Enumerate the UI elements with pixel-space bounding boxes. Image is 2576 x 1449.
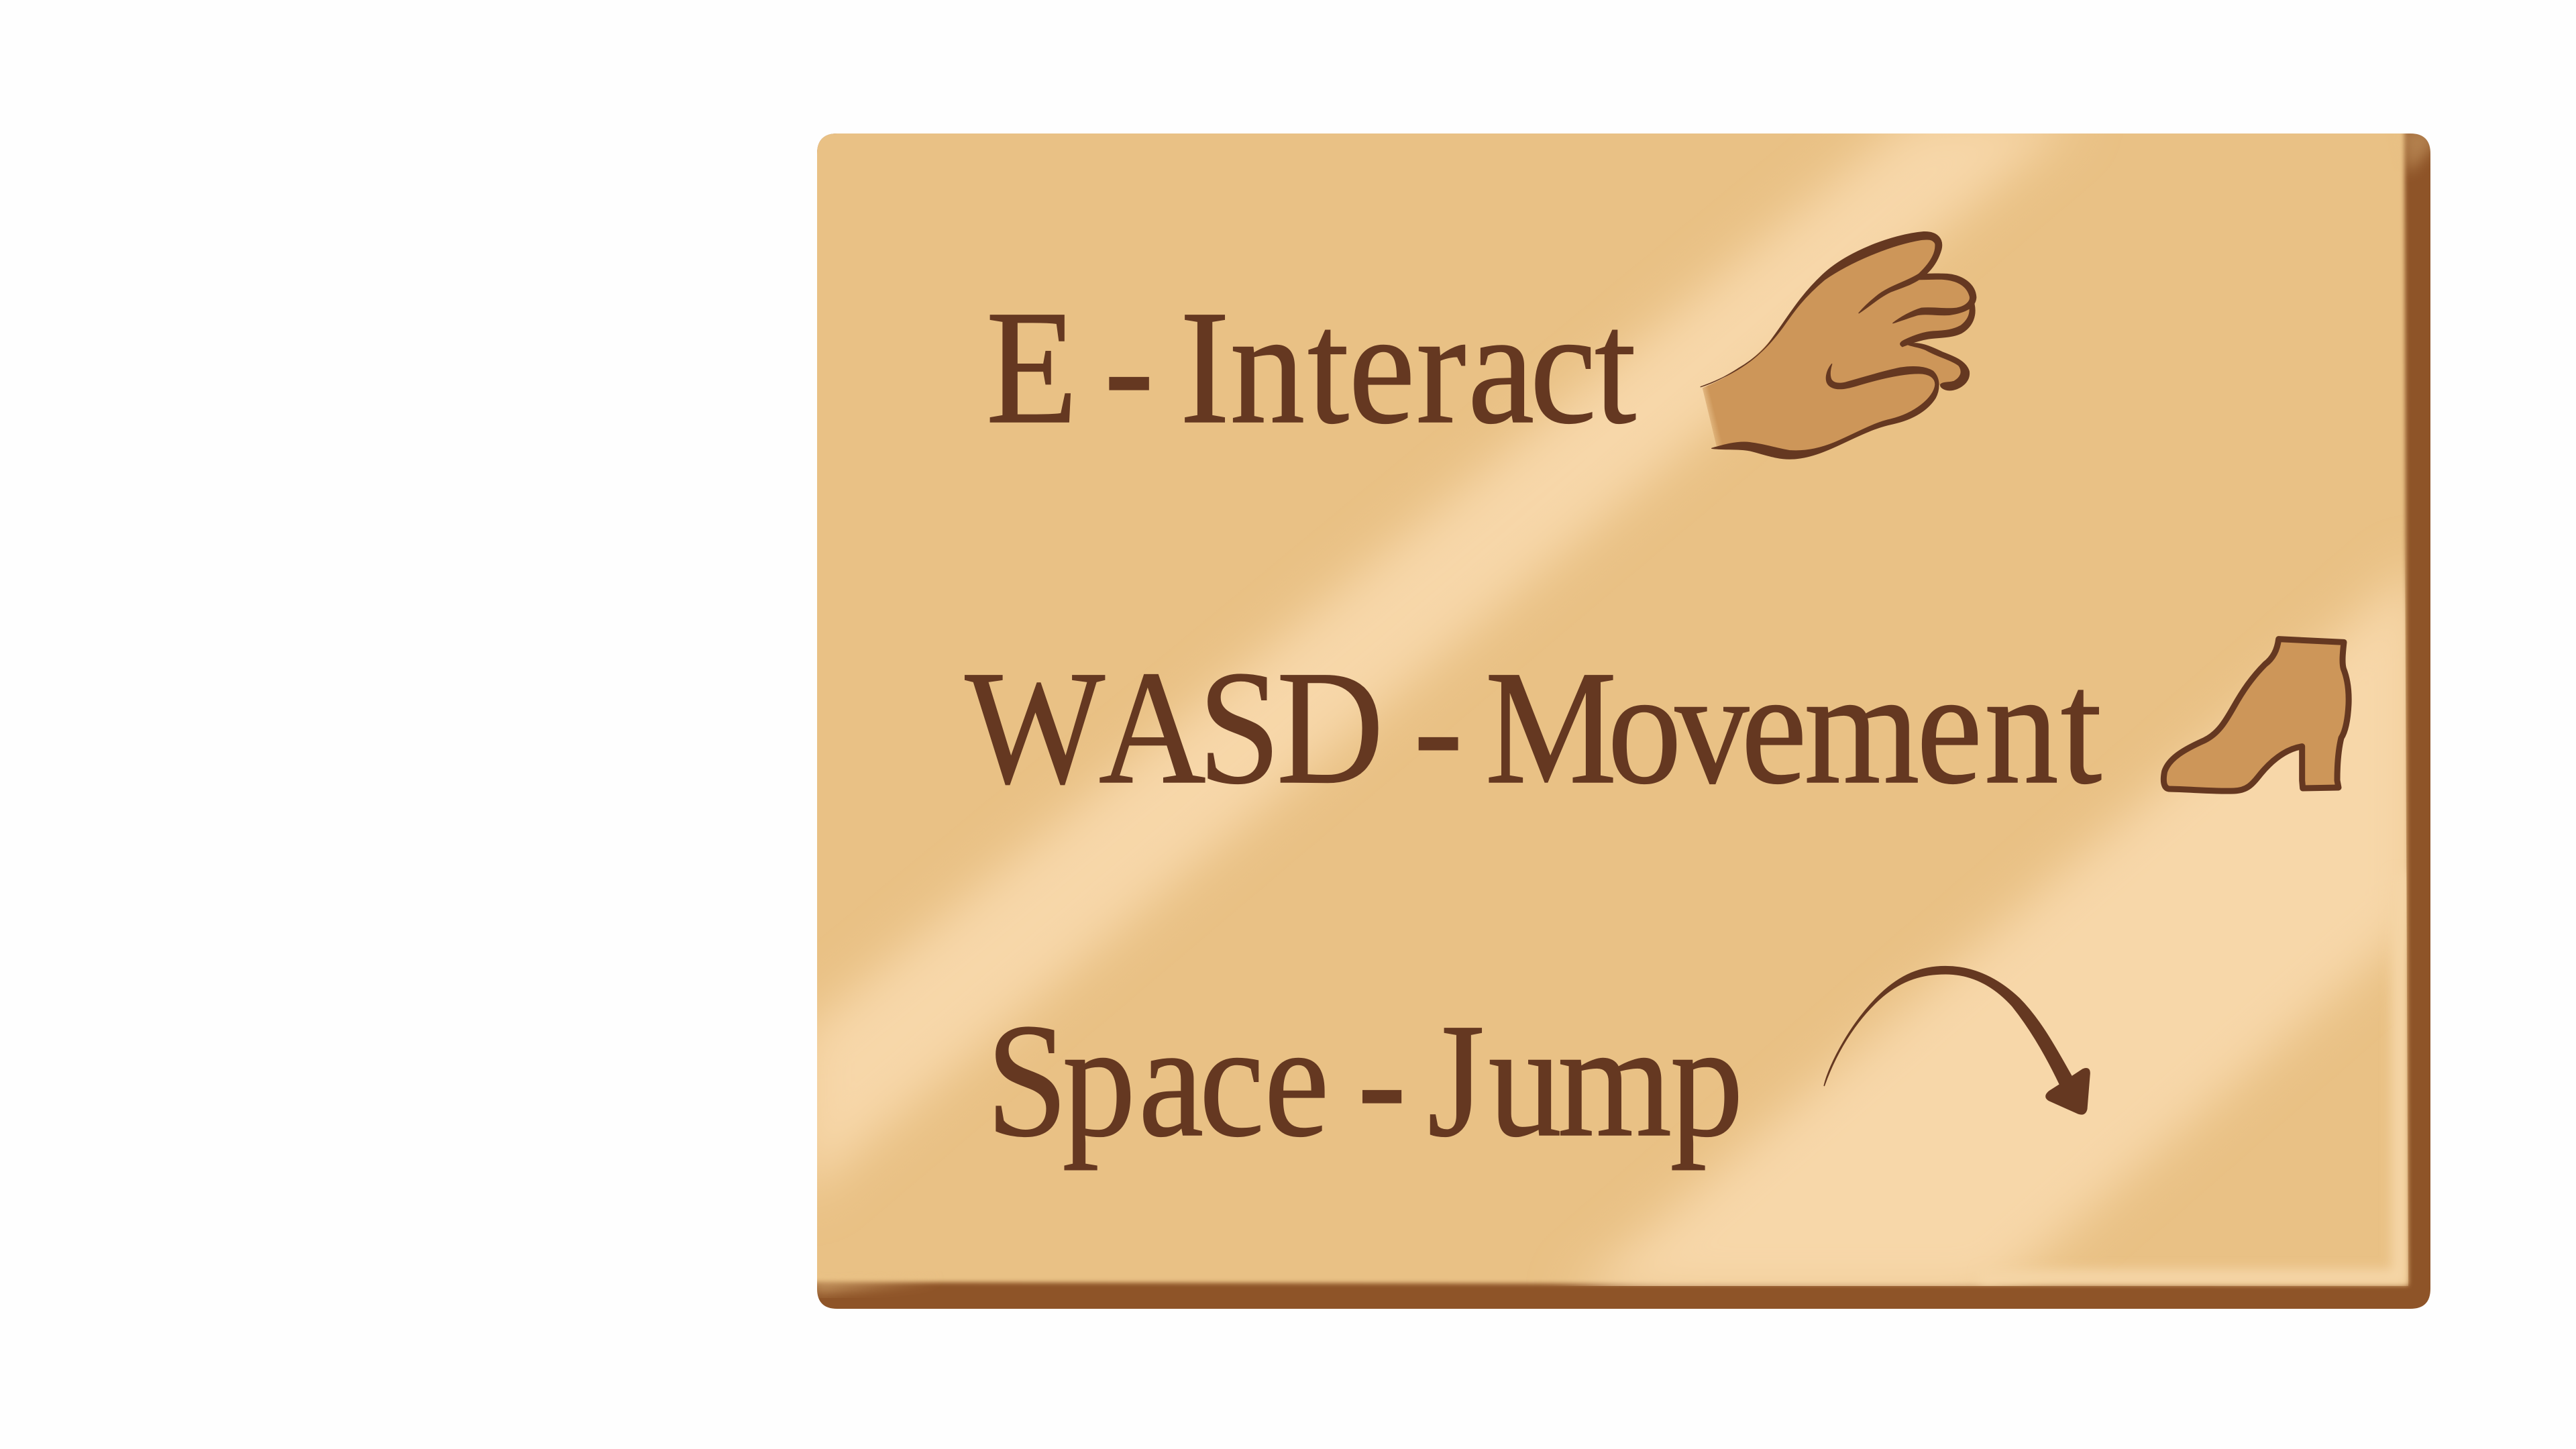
panel edge: brown side	[817, 133, 2430, 1309]
panel: controls sign	[792, 101, 2435, 1309]
label: WASD - Movement: WASD - Movement	[965, 638, 2102, 818]
panel face	[792, 101, 2408, 1285]
edge fade: top right	[2403, 133, 2430, 173]
icon: hand	[1701, 232, 1976, 459]
glossy highlights	[798, 114, 2422, 1298]
icon: boot	[2163, 639, 2349, 791]
icon: jump arrow	[1824, 967, 2090, 1114]
label: E - Interact: E - Interact	[986, 277, 1636, 458]
label: Space - Jump: Space - Jump	[986, 991, 1743, 1171]
edge fade: bottom left	[805, 1278, 939, 1291]
